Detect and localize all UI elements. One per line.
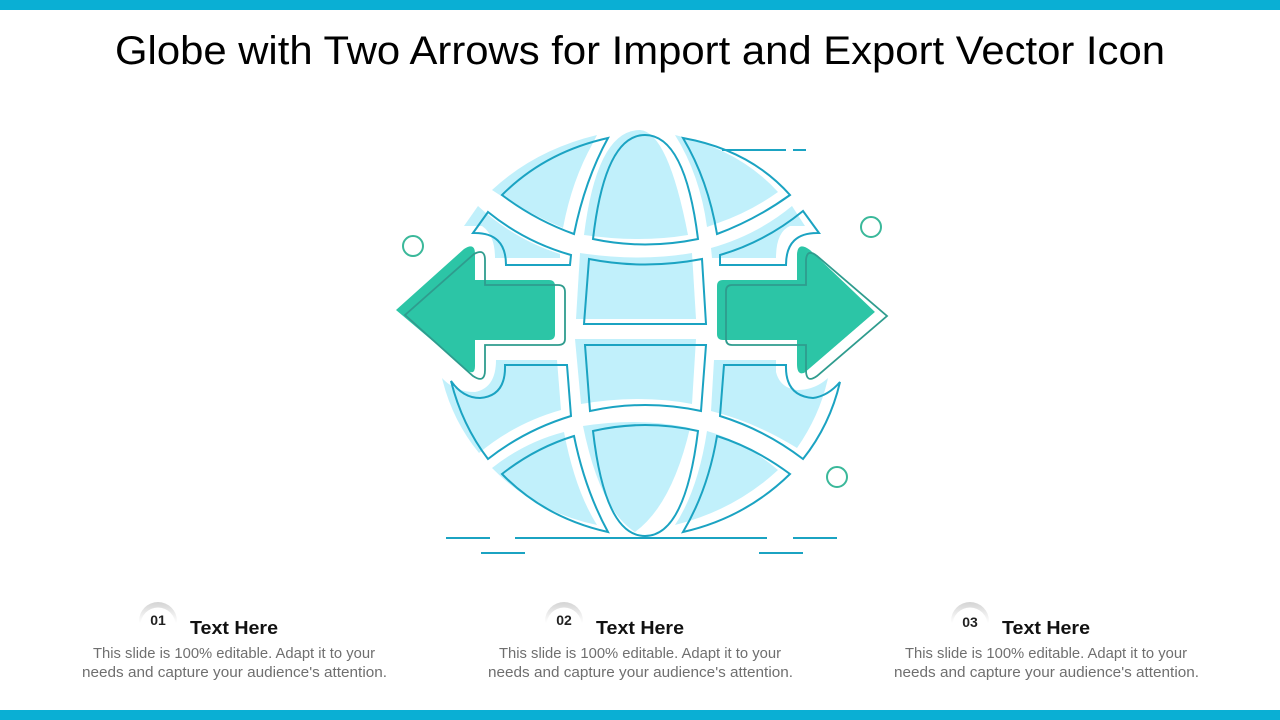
top bar [0, 0, 1280, 10]
globe segment: lower right [711, 360, 840, 459]
heading 03: Text Here [1002, 617, 1090, 638]
ground lines [446, 150, 837, 553]
decorative circle: lower right [827, 467, 847, 487]
title: Globe with Two Arrows for Import and Export Vector Icon [115, 29, 1165, 73]
description 01 [82, 646, 387, 681]
number badge 03 [951, 602, 989, 642]
number badge 03: 03 [962, 614, 978, 630]
number badge 02: 02 [556, 612, 572, 628]
description 03: This slide is 100% editable. Adapt it to your [905, 646, 1187, 662]
globe segment: bottom left [492, 432, 608, 532]
decorative circle: left [403, 236, 423, 256]
text block 02 [488, 602, 793, 681]
description 02: needs and capture your audience's attention. [488, 665, 793, 681]
globe icon [442, 130, 840, 536]
globe segment: middle lower [575, 339, 706, 411]
number badge 02 [545, 602, 583, 642]
bottom bar [0, 710, 1280, 720]
text block 03 [894, 602, 1199, 681]
description 03 [894, 646, 1199, 681]
left arrow [396, 246, 565, 379]
globe segment: bottom right [675, 431, 790, 532]
description 01: needs and capture your audience's attention. [82, 665, 387, 681]
globe segment: upper right [711, 206, 819, 265]
number badge 01 [139, 602, 177, 642]
text block 01 [82, 602, 387, 681]
decorative circle: upper right [861, 217, 881, 237]
right arrow [717, 246, 887, 380]
globe segment: upper left [464, 206, 571, 265]
globe segment: top left [492, 135, 608, 234]
description 03: needs and capture your audience's attention. [894, 665, 1199, 681]
globe segment: bottom centre [583, 422, 698, 536]
globe segment: top right [675, 135, 790, 234]
description 01: This slide is 100% editable. Adapt it to your [93, 646, 375, 662]
globe segment: middle upper [576, 253, 706, 324]
description 02 [488, 646, 793, 681]
heading 01: Text Here [190, 617, 278, 638]
globe segment: top centre [584, 130, 698, 244]
number badge 01: 01 [150, 612, 166, 628]
description 02: This slide is 100% editable. Adapt it to your [499, 646, 781, 662]
globe segment: lower left [442, 360, 571, 459]
heading 02: Text Here [596, 617, 684, 638]
